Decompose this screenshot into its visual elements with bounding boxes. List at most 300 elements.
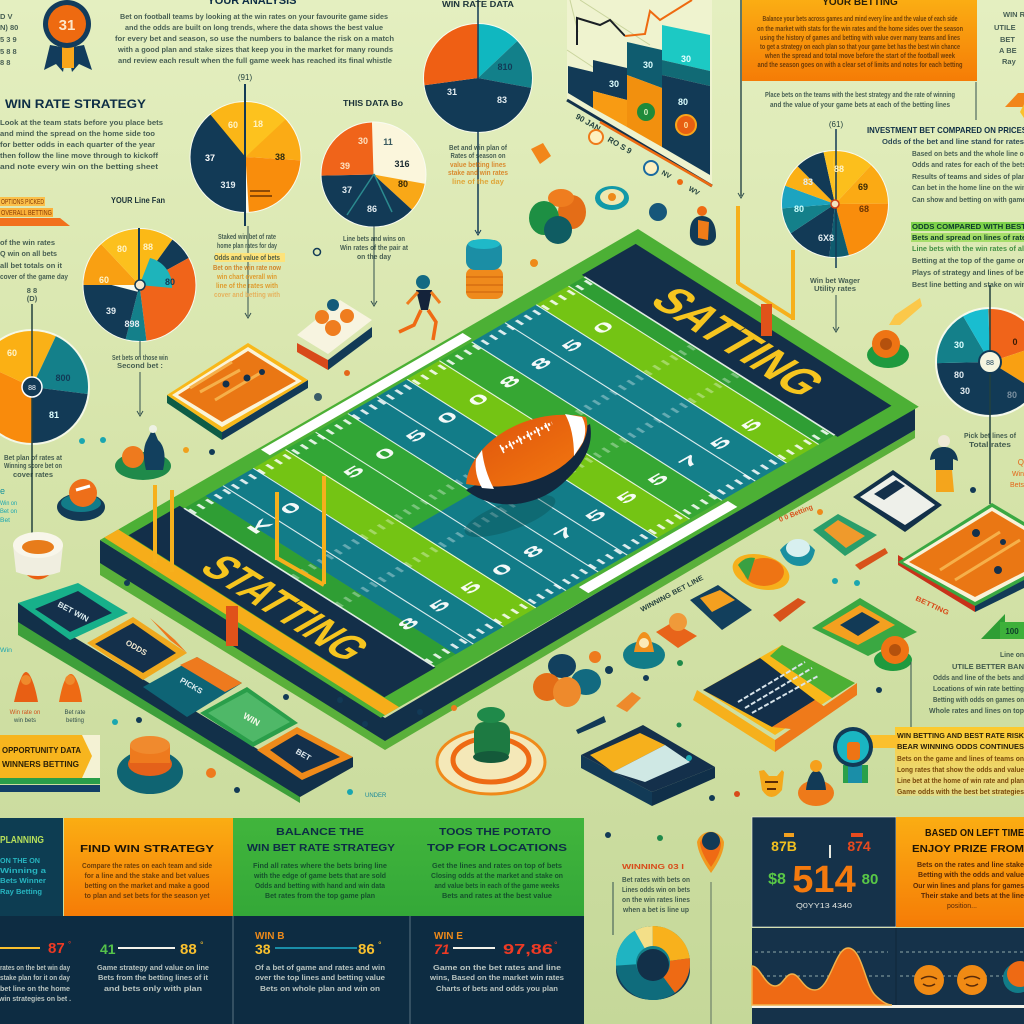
bottom stat column 3: over the top lines and betting value — [255, 973, 385, 982]
pie chart 1 — [190, 73, 302, 226]
bottom stat column 4: Charts of bets and odds you plan — [436, 984, 558, 993]
bottom panel orange: to plan and set bets for the season yet — [84, 891, 210, 900]
bottom navy row left: ° — [68, 940, 71, 949]
isometric bar chart: 30 — [681, 54, 691, 64]
yellow text block with connector: BEAR WINNING ODDS CONTINUES — [897, 742, 1024, 751]
yard numbers: 8 — [393, 615, 424, 633]
pie chart 5: 83 — [497, 95, 507, 105]
yard numbers: 5 — [557, 336, 588, 355]
bottom panel green 2 — [410, 818, 584, 916]
pie 4 caption: Winning score bet on — [4, 461, 62, 470]
cup icon — [13, 532, 63, 580]
bottom right navy stats panel: 874 — [847, 838, 871, 854]
pie 5 caption: Rates of season on — [450, 151, 506, 160]
top right text fragment: BET — [1000, 35, 1015, 44]
right lower text block — [911, 650, 1024, 727]
coin stack on disc icon — [117, 736, 183, 794]
top left text fragment: 5 3 9 — [0, 35, 17, 44]
pie 1 highlighted caption: win chart overall win — [216, 272, 277, 281]
person icons: Win rate on — [10, 710, 40, 716]
yard numbers: 8 — [495, 372, 525, 391]
pie chart 7: 30 — [954, 340, 964, 350]
caption tilted: WINNING BET LINE — [640, 575, 705, 614]
orange tag: OPTIONS PICKED — [1, 199, 44, 206]
end zone label bottom: STATTING — [188, 549, 381, 668]
bottom panel green 2: and value bets in each of the game weeks — [434, 881, 560, 890]
bottom navy row left: Game strategy and value on line — [97, 963, 209, 972]
pie chart 3: 80 — [165, 277, 175, 287]
center caption — [613, 862, 711, 1024]
heading: win rate strategy: WIN RATE STRATEGY — [5, 99, 146, 111]
bottom stat column 4: 97,86 — [503, 941, 553, 958]
pie chart 6: 80 — [794, 204, 804, 214]
isometric bar chart: 30 — [609, 79, 619, 89]
person icon — [690, 206, 716, 246]
pie 1 highlighted caption — [213, 226, 285, 318]
card 4: WIN — [241, 711, 262, 728]
pie chart 3: 60 — [99, 275, 109, 285]
left edge cyan fragments: Win — [0, 648, 12, 654]
orange blob icon — [729, 548, 793, 596]
iso tablet right — [898, 503, 1024, 612]
pie 3 title: YOUR Line Fan — [111, 196, 165, 205]
yard numbers: 5 — [339, 463, 369, 481]
intro paragraph: with a good plan and stake sizes that keep you in the market for many rounds — [117, 45, 393, 54]
yard numbers: 0 — [276, 499, 306, 518]
yard numbers: 5 — [643, 470, 674, 489]
right green text block: Bets and spread on lines of rate — [912, 233, 1024, 242]
pie 7 caption — [964, 431, 1024, 489]
pie chart 6: 83 — [803, 177, 813, 187]
top right text fragment: Ray — [1002, 57, 1017, 66]
orange tag — [0, 197, 70, 226]
football player icon — [399, 275, 440, 340]
pie 7 caption: Q — [1018, 458, 1024, 467]
small caption: 0 0 Betting — [778, 504, 814, 524]
bottom panel green 1: Find all rates where the bets bring line — [253, 861, 387, 870]
pie 5 caption: stake and win rates — [448, 168, 508, 177]
center caption: Bet rates with bets on — [622, 875, 690, 884]
pie chart 3: 39 — [106, 306, 116, 316]
orb with tag icon — [867, 298, 922, 368]
orange tag: OVERALL BETTING — [1, 210, 52, 217]
pie 1 highlighted caption: Odds and value of bets — [214, 253, 280, 262]
red caption: BETTING — [914, 595, 950, 617]
pie chart 3: 80 — [117, 244, 127, 254]
card 5: BET — [294, 747, 313, 763]
snack stack icon — [297, 299, 372, 370]
pie chart 6: 68 — [859, 204, 869, 214]
bottom stat column 3: ° — [378, 940, 382, 950]
pie 3 caption and arrow: Set bets on those win — [112, 353, 168, 362]
bottom right orange panel: ENJOY PRIZE FROM — [912, 844, 1024, 855]
strategy paragraph: and note every win on the betting sheet — [0, 162, 159, 171]
small scattered icons — [79, 248, 976, 841]
pie 1 highlighted caption: cover and betting with — [214, 290, 280, 299]
pie chart 7: 30 — [960, 386, 970, 396]
pie 3 caption and arrow — [112, 341, 168, 416]
top right text fragment — [994, 10, 1024, 118]
left edge cyan fragments: Win on — [0, 501, 17, 507]
left small text: Q win on all bets — [0, 249, 57, 258]
pie chart 1: 319 — [220, 180, 236, 190]
top right text fragment: UTILE — [994, 23, 1016, 32]
small bar icon — [773, 598, 806, 622]
card 2 — [87, 617, 187, 680]
pie 6 caption and arrow — [810, 276, 860, 332]
yellow banner: WINNERS BETTING — [2, 760, 79, 769]
bottom right navy stats panel: 87B — [771, 838, 797, 854]
left small text: of the win rates — [0, 238, 55, 247]
person icon white hair — [930, 435, 958, 492]
small badge icon — [576, 716, 606, 734]
intro paragraph: for every bet and season, so use the numbers to balance the risk on a match — [115, 34, 394, 43]
person icons: betting — [66, 718, 84, 724]
bottom right navy stats panel: 80 — [862, 871, 878, 888]
bottom panel orange: FIND WIN STRATEGY — [80, 843, 214, 855]
top left text fragment — [0, 12, 18, 67]
pie 1 highlighted caption: line of the rates with — [216, 281, 278, 290]
bottom right navy stats panel — [752, 817, 896, 927]
target with chips icon — [437, 707, 545, 794]
strategy paragraph: Look at the team stats before you place bets — [0, 118, 163, 127]
document card icon — [853, 470, 942, 532]
green triangle tag: 100 — [1005, 627, 1019, 636]
bottom navy row left: 87 — [48, 940, 65, 957]
pie 3 caption and arrow: Second bet : — [117, 361, 163, 370]
bottom right navy stats panel: Q0YY13 4340 — [796, 901, 852, 910]
pie chart 6: 88 — [834, 164, 844, 174]
pie chart 6: 6X8 — [818, 233, 834, 243]
pie chart 1: 37 — [205, 153, 215, 163]
isometric bar chart: 0 — [644, 108, 649, 117]
tiger mascot icon — [759, 770, 784, 797]
top left text fragment: D V — [0, 12, 13, 21]
yard numbers — [242, 318, 770, 633]
chip stack icon — [466, 239, 503, 299]
teal pin icon — [833, 727, 873, 783]
bottom right orange panel: Their stake and bets at the line — [921, 893, 1024, 900]
pie chart 2: 86 — [367, 204, 377, 214]
pie chart 7: 80 — [1007, 390, 1017, 400]
strategy paragraph: and mind the spread on the home side too — [0, 129, 155, 138]
right text block — [867, 125, 1024, 204]
strategy paragraph — [0, 118, 163, 171]
bottom stat column 4: WIN E — [434, 931, 463, 942]
pie 2 caption and arrow — [340, 226, 408, 306]
center caption: Lines odds win on bets — [622, 885, 690, 894]
left small text: cover of the game day — [0, 272, 69, 281]
header sub-caption — [765, 90, 955, 109]
left edge cyan fragments: e — [0, 486, 5, 496]
pie chart 2 — [320, 122, 426, 228]
hash marks — [188, 280, 829, 664]
pie chart 5: 810 — [497, 62, 513, 72]
yard numbers: K — [242, 516, 277, 537]
bottom stat column 3: 86 — [358, 941, 375, 958]
coin icons — [914, 961, 1024, 995]
right text block: Odds of the bet and line stand for rates — [882, 137, 1024, 146]
left small text — [0, 238, 69, 303]
pie 2 caption and arrow: on the day — [357, 252, 392, 261]
disc with bottle icon — [115, 425, 171, 480]
card 5 — [257, 727, 353, 780]
green orange card icon — [813, 514, 877, 556]
area chart — [752, 948, 892, 1005]
top right text fragment: A BE — [999, 46, 1017, 55]
pie chart 4: 60 — [7, 348, 17, 358]
bottom panel green 1: WIN BET RATE STRATEGY — [247, 843, 395, 854]
coin stacks icon — [529, 189, 586, 244]
strategy paragraph: then follow the line move through to kickoff — [0, 151, 159, 160]
right green text block — [911, 222, 1024, 289]
person icons: win bets — [13, 718, 36, 724]
bottom navy row left: and bets only with plan — [104, 984, 202, 993]
header sub-caption: Place bets on the teams with the best strategy and the rate of winning — [765, 90, 955, 99]
bottom navy row left: stake plan for it on day — [0, 973, 71, 982]
bottom navy row left: rates on the bet win day — [0, 963, 71, 972]
small dot icon — [206, 768, 216, 778]
header sub-caption: and the value of your game bets at each of the betting lines — [770, 100, 950, 109]
center caption: on the win rates lines — [622, 895, 690, 904]
pie 7 caption: Total rates — [969, 440, 1011, 449]
yard numbers: 0 — [370, 445, 400, 463]
bottom navy row left: 88 — [180, 941, 197, 958]
bottom panel left navy: ON THE ON — [0, 856, 40, 865]
bottom right chart panel — [752, 928, 1024, 1024]
pie chart 2: 80 — [398, 179, 408, 189]
yellow text block with connector — [870, 727, 1024, 796]
yard numbers: 7 — [549, 524, 580, 543]
bottom stat column 3: Bets on whole plan and win on — [260, 984, 380, 993]
bottom stat column 3: WIN B — [255, 931, 284, 942]
pie chart 4 — [0, 304, 90, 534]
pie chart 2: 11 — [383, 137, 393, 147]
football field surface — [100, 229, 919, 718]
pie 2 caption and arrow: Line bets and wins on — [343, 234, 405, 243]
yard numbers: 0 — [487, 561, 517, 579]
football field base — [100, 405, 915, 750]
pie chart 4: 81 — [49, 410, 59, 420]
left small text: (D) — [27, 294, 38, 303]
token icon — [595, 186, 629, 210]
yellow banner: OPPORTUNITY DATA — [2, 745, 81, 755]
small orange device icon — [656, 613, 697, 648]
bottom panel orange: betting on the market and make a good — [84, 881, 210, 890]
bottom panel orange — [64, 818, 233, 916]
map pin icon — [697, 832, 724, 873]
pie chart 1: 38 — [275, 152, 285, 162]
small strip icon — [855, 548, 888, 570]
yard numbers: 5 — [736, 416, 767, 435]
bottom stat column 4 — [429, 931, 564, 993]
left edge cyan fragments: Bet — [0, 518, 10, 524]
bottom panel green 2: Bets and rates at the best value — [442, 891, 552, 900]
bottom stat column 4: ° — [554, 940, 558, 950]
intro paragraph: Bet on football teams by looking at the win rates on your favourite game sides — [120, 12, 388, 21]
bottom panel left navy: Bets Winner — [0, 876, 46, 885]
card row base — [18, 603, 353, 803]
pie 5 caption — [448, 143, 508, 186]
bottom panel green 1: Bet rates from the top game plan — [265, 891, 375, 900]
goalpost top — [736, 206, 795, 336]
isometric bar chart: WV — [687, 186, 701, 198]
yellow front strip — [104, 529, 399, 715]
bottom navy row left: Bets from the betting lines of it — [98, 973, 208, 982]
3D donut chart — [616, 926, 690, 1000]
iso tablet lower — [581, 725, 715, 806]
bottom stat column 3: 38 — [255, 941, 271, 957]
bottom navy row left: bet line on the home — [0, 984, 70, 993]
pie chart 1: (91) — [238, 73, 252, 82]
capsule icon — [616, 692, 641, 712]
center caption: WINNING 03 I — [622, 862, 684, 871]
left edge cyan fragments: Bet on — [0, 509, 17, 515]
pie chart 3 — [82, 228, 196, 342]
pie 4 caption: cover rates — [13, 470, 53, 479]
orange cube icon — [531, 143, 551, 164]
yard lines — [183, 276, 835, 667]
pie chart 7: 88 — [986, 360, 994, 367]
pie chart 1: 18 — [253, 119, 263, 129]
pie 5 caption: Bet and win plan of — [449, 143, 507, 152]
bottom panel orange: Compare the rates on each team and side — [82, 861, 212, 870]
pie chart 7: 80 — [954, 370, 964, 380]
yard numbers: 5 — [580, 506, 611, 525]
bottom stat column 3 — [255, 931, 385, 993]
pie chart 5: 31 — [447, 87, 457, 97]
small ball icon — [649, 203, 667, 221]
yard numbers: 7 — [674, 452, 705, 471]
bottom panel left navy: PLANNING — [0, 835, 44, 846]
bottom right navy stats panel: $8 — [768, 871, 786, 888]
bottom panel green 1: Odds and betting with hand and win data — [255, 881, 386, 890]
pie chart 7: 0 — [1012, 337, 1018, 347]
pie chart 4: 88 — [28, 385, 36, 392]
pie chart 6 — [781, 120, 889, 268]
pie 6 caption and arrow: Win bet Wager — [810, 276, 860, 285]
bottom panel green 2: Get the lines and rates on top of bets — [432, 861, 562, 870]
left edge cyan fragments — [0, 486, 17, 654]
bottom right orange panel: Our win lines and plans for games — [913, 883, 1024, 890]
orange header panel — [742, 0, 977, 81]
card 4 — [200, 687, 298, 747]
yard numbers: 5 — [424, 596, 455, 615]
pie 1 highlighted caption: home plan rates for day — [217, 241, 278, 250]
left small text: 8 8 — [27, 286, 37, 295]
pie 4 caption: Bet plan of rates at — [4, 453, 62, 462]
pie chart 5 — [423, 0, 533, 235]
pie 7 caption: Win — [1012, 471, 1024, 478]
bottom navy row left: 41 — [100, 941, 116, 957]
bottom panel green 2: Closing odds at the market and stake on — [431, 871, 563, 880]
football — [460, 414, 591, 546]
medal icon: 31 — [59, 17, 75, 34]
field stripes — [184, 277, 835, 667]
pie 2 title: THIS DATA Bo — [343, 99, 403, 108]
bottom stat column 3: Of a bet of game and rates and win — [255, 963, 385, 972]
green credit card icon — [812, 598, 917, 656]
top left text fragment: 8 8 — [0, 58, 10, 67]
pie chart 1: 60 — [228, 120, 238, 130]
bottom panel left navy — [0, 818, 63, 916]
isometric bar chart: 0 — [684, 121, 689, 130]
person icons — [10, 672, 86, 724]
bottom navy row left: win strategies on bet . — [0, 994, 71, 1003]
goalpost bottom — [153, 476, 326, 646]
yard numbers: 5 — [401, 427, 432, 445]
bottom panel green 2: TOP FOR LOCATIONS — [427, 843, 567, 854]
intro paragraph: and the odds are built on long trends, where the data shows the best value — [125, 23, 383, 32]
shield icon — [780, 539, 815, 566]
small green caption: UNDER — [365, 793, 387, 799]
bottom navy row left — [0, 916, 584, 1024]
top left text fragment: N) 80 — [0, 23, 18, 32]
right green text block: ODDS COMPARED WITH BEST — [912, 222, 1024, 231]
bottom right orange panel: position... — [947, 903, 977, 910]
bottom panel orange: for a line and the stake and bet values — [84, 871, 210, 880]
pie 4 caption — [4, 453, 62, 479]
disc with ball icon — [57, 479, 105, 521]
pie 2 caption and arrow: Win rates of the pair at — [340, 243, 408, 252]
person icons: Bet rate — [64, 710, 86, 716]
isometric bar chart: 80 — [678, 97, 688, 107]
green triangle tag — [981, 614, 1024, 639]
orange header panel: when the spread and total move before the start of the football week — [764, 51, 956, 60]
pie 6 caption and arrow: Utility rates — [814, 284, 856, 293]
yellow banner — [0, 735, 100, 792]
yellow text block with connector: Game odds with the best bet strategies — [897, 789, 1024, 796]
top end zone — [582, 244, 891, 437]
yard numbers: 0 — [432, 409, 463, 427]
pie chart 6: 69 — [858, 182, 868, 192]
card 3 — [143, 657, 242, 717]
bottom right orange panel — [896, 817, 1024, 927]
bottom panel green 2: TOOS THE POTATO — [439, 827, 551, 838]
yard numbers: 5 — [705, 434, 736, 453]
bottom panel left navy: Winning a — [0, 866, 47, 875]
pawn icon — [798, 760, 834, 806]
end zone label top: SATTING — [638, 281, 837, 404]
intro paragraph: and review each result when the full game week has reached its final whistle — [118, 56, 392, 65]
center caption: when a bet is line up — [622, 905, 689, 914]
pie chart 7 — [935, 285, 1024, 504]
card 1 — [18, 583, 128, 640]
header vertical arrow — [738, 0, 976, 198]
bottom panel green 1: with the edge of game bets that are sold — [253, 871, 386, 880]
pie chart 6: (61) — [829, 120, 843, 129]
bottom panel left navy: Ray Betting — [0, 887, 42, 896]
pie chart 2: 39 — [340, 161, 350, 171]
yard numbers: 0 — [588, 318, 619, 337]
bottom right orange panel: Betting with the odds and value — [918, 872, 1024, 879]
pie 7 caption: Bets — [1010, 482, 1024, 489]
card 3: PICKS — [178, 676, 205, 696]
card 2: ODDS — [124, 638, 149, 658]
bottom stat column 4: 71 — [434, 941, 450, 957]
pie 1 highlighted caption: Bet on the win rate now — [213, 263, 281, 272]
isometric bar chart: 30 — [643, 60, 653, 70]
pie 5 caption: value betting lines — [450, 160, 506, 169]
card 1: BET WIN — [56, 600, 90, 624]
bottom right orange panel: Bets on the rates and line stake — [917, 862, 1024, 869]
right lower text block: UTILE BETTER BAN — [952, 662, 1024, 671]
bottom stat column 4: Game on the bet rates and line — [433, 963, 561, 972]
pie 5 title: WIN RATE DATA — [442, 0, 514, 9]
yard numbers: 0 — [463, 391, 494, 409]
yard numbers: 8 — [526, 354, 557, 373]
bottom end zone — [129, 506, 435, 697]
